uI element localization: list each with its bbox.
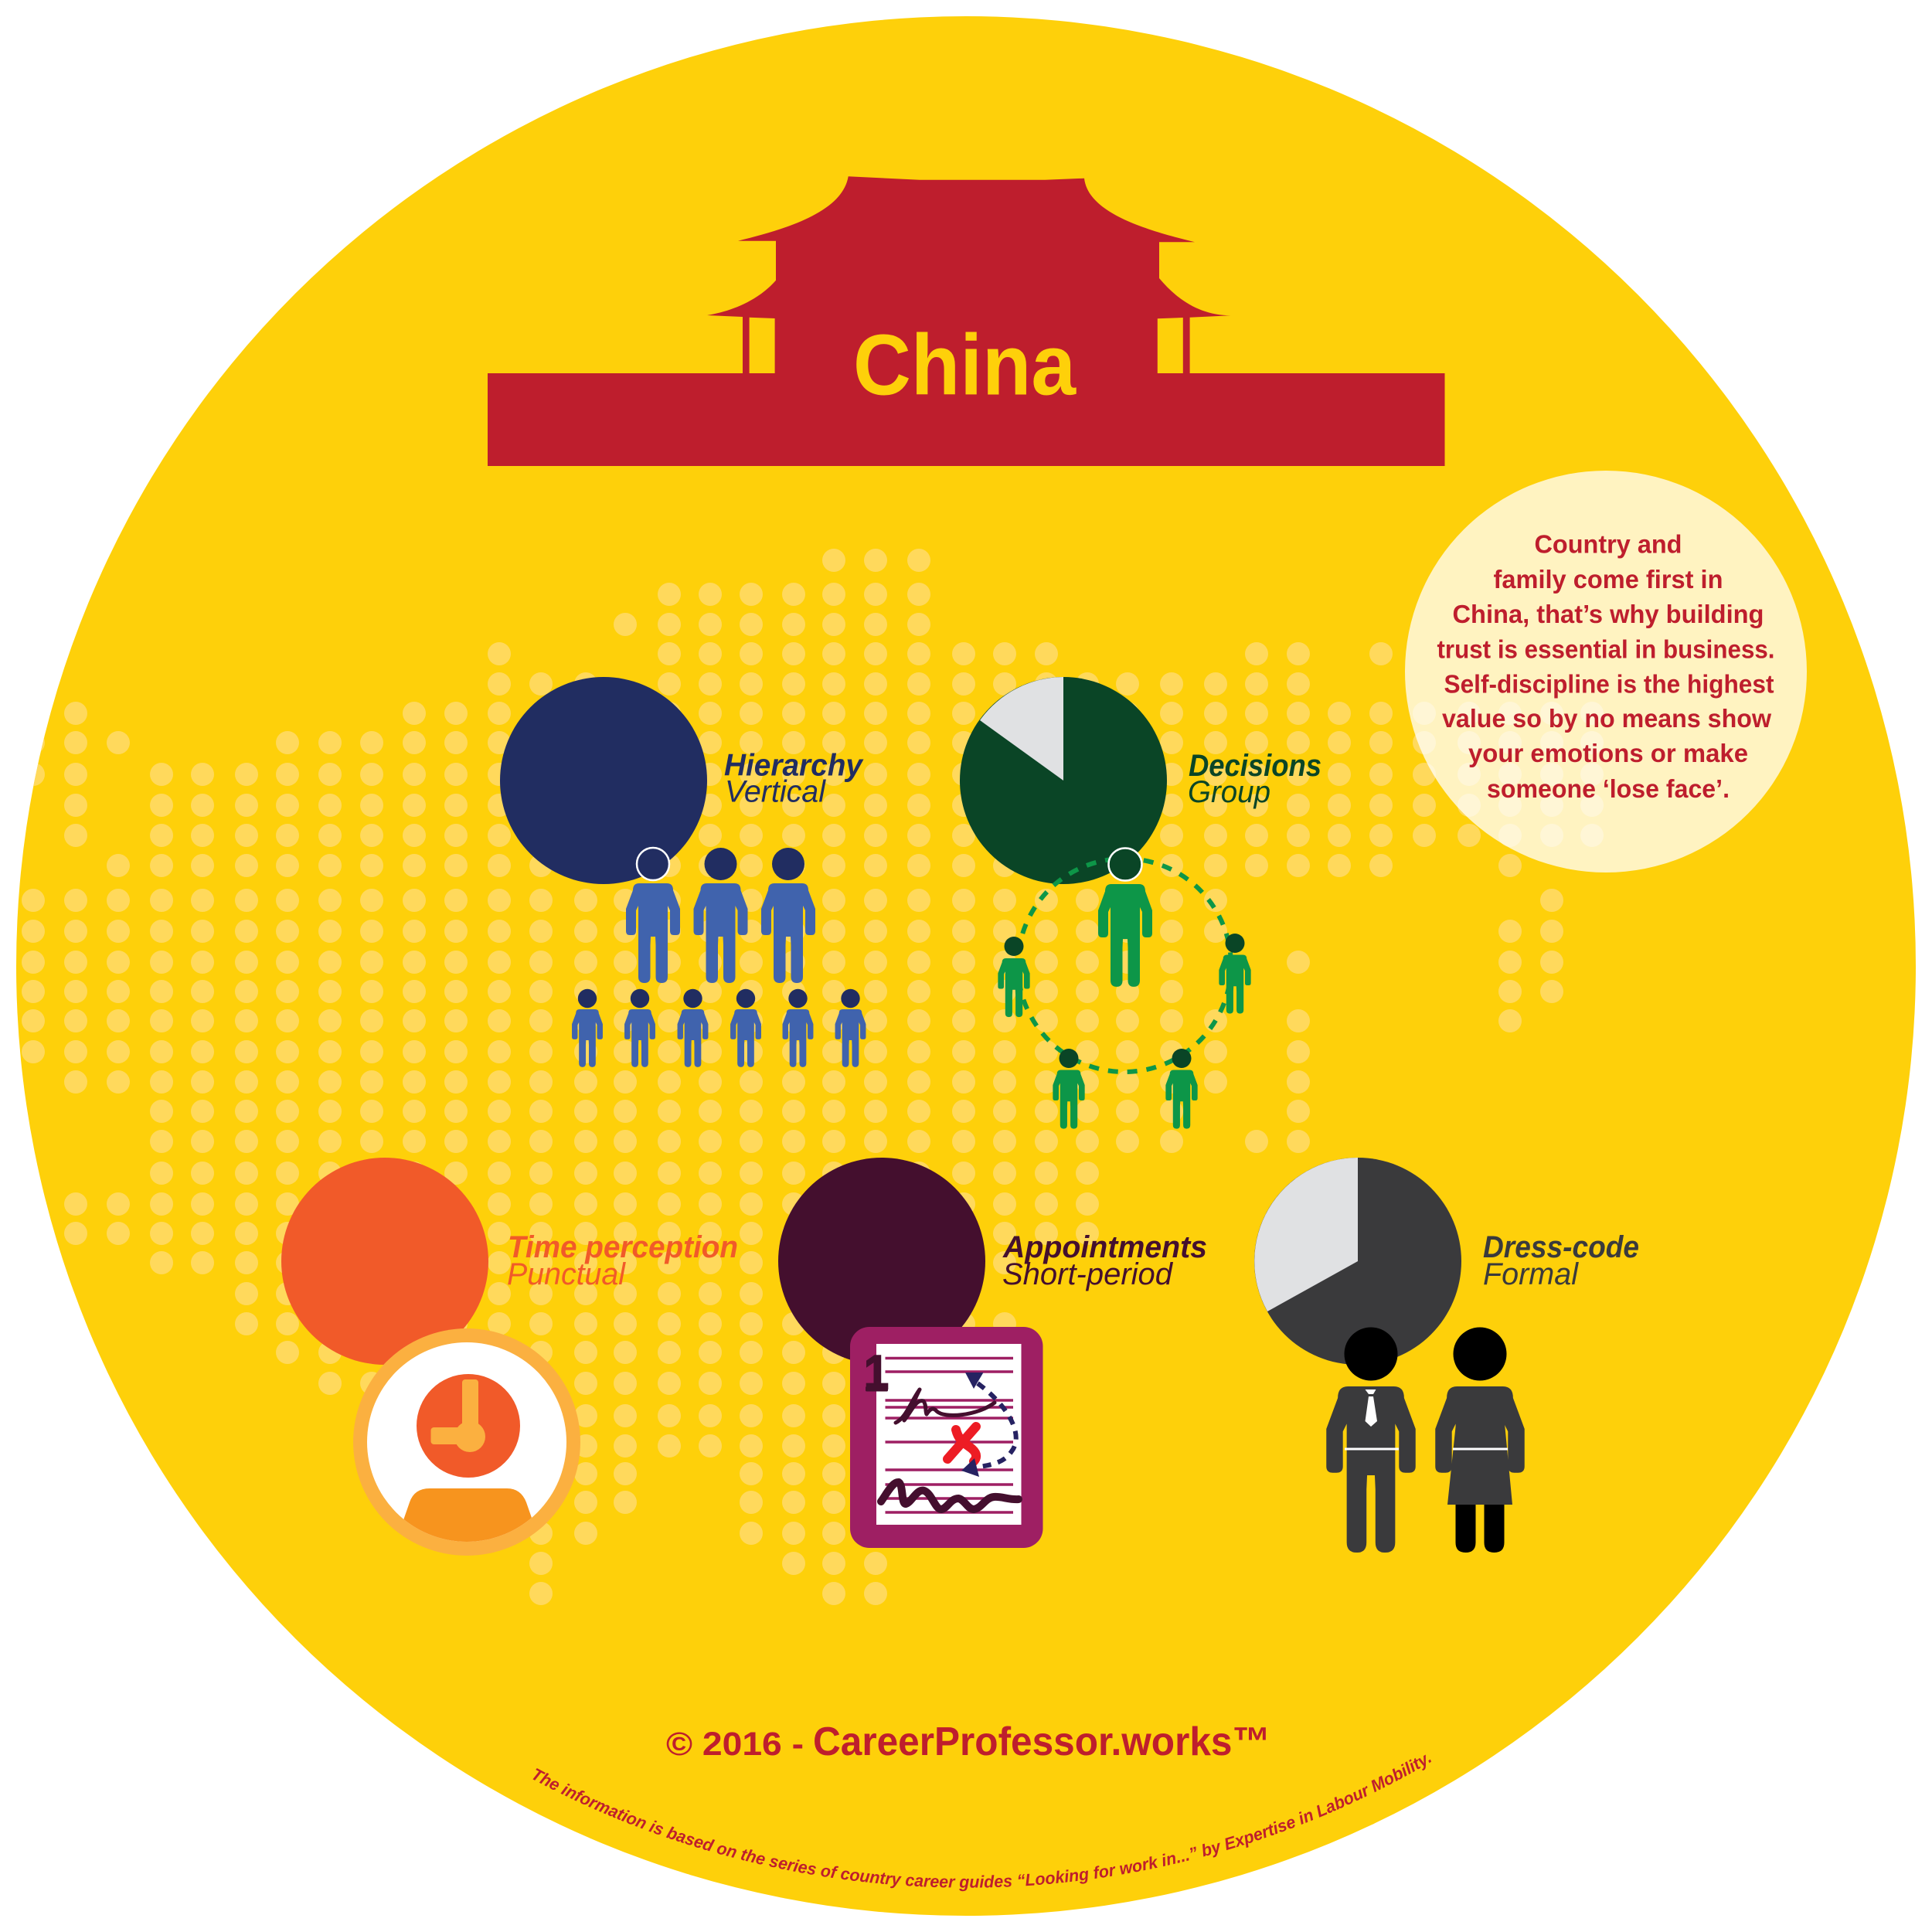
bubble background — [1405, 471, 1807, 872]
dotted world map of China — [33, 560, 1593, 1594]
label: dress-code — [1483, 1230, 1639, 1291]
callout text: value so by no means show — [1442, 704, 1771, 733]
icon: woman in dress — [1435, 1328, 1525, 1553]
label: hierarchy — [724, 748, 864, 808]
icon: three senior figures — [626, 848, 815, 983]
panel: hierarchy — [500, 677, 866, 1067]
label: time perception — [507, 1230, 738, 1291]
pie: appointments — [778, 1158, 985, 1365]
label: dress-code: Dress-code — [1483, 1230, 1639, 1264]
callout text: someone ‘lose face’. — [1487, 774, 1730, 803]
label: decisions: Group — [1188, 775, 1270, 809]
label: dress-code: Formal — [1483, 1257, 1579, 1291]
icon: six junior figures — [572, 989, 866, 1067]
label: hierarchy: Hierarchy — [724, 748, 864, 782]
callout text — [1437, 530, 1774, 803]
callout text: trust is essential in business. — [1437, 635, 1774, 663]
callout text: Country and — [1535, 530, 1682, 558]
temple windows — [750, 318, 1183, 373]
label: appointments: Appointments — [1002, 1230, 1207, 1264]
callout text: China, that’s why building — [1453, 600, 1764, 628]
icon: man in suit — [1326, 1328, 1416, 1553]
label: appointments: Short-period — [1002, 1257, 1174, 1291]
panel: appointments — [778, 1158, 1207, 1548]
dashed decision ring — [1018, 859, 1231, 1072]
icon: group member figures — [998, 934, 1251, 1129]
temple silhouette — [488, 176, 1445, 466]
callout text: Self-discipline is the highest — [1444, 669, 1774, 699]
pie: time perception — [281, 1158, 488, 1365]
pie: decisions — [960, 677, 1167, 884]
icon: agenda tablet — [850, 1327, 1043, 1548]
label: time perception: Punctual — [507, 1257, 626, 1291]
icon: clock-headed person — [353, 1328, 580, 1556]
panel: dress-code — [1254, 1158, 1639, 1553]
panel: time perception — [281, 1158, 738, 1556]
label: appointments — [1002, 1230, 1207, 1291]
label: decisions — [1188, 749, 1321, 809]
callout bubble — [1405, 471, 1807, 872]
copyright line: © 2016 - — [666, 1726, 804, 1763]
panel: decisions — [960, 677, 1321, 1129]
curved source note: The information is based on the series of country career guides “Looking for work in...” by Expertise in Labour Mobility. — [533, 1754, 1431, 1892]
label: decisions: Decisions — [1189, 749, 1321, 783]
title banner: red temple silhouette with China — [488, 176, 1445, 466]
callout text: family come first in — [1493, 565, 1723, 594]
pie: hierarchy — [500, 677, 707, 884]
heading: China: China — [853, 317, 1077, 413]
label: hierarchy: Vertical — [725, 774, 826, 808]
icon: agenda tablet: 1 — [864, 1346, 889, 1400]
label: time perception: Time perception — [508, 1230, 738, 1264]
callout text: your emotions or make — [1468, 739, 1748, 767]
icon: group lead figure — [1098, 849, 1152, 987]
pie: dress-code — [1254, 1158, 1461, 1365]
copyright line: CareerProfessor.works™ — [813, 1719, 1270, 1764]
